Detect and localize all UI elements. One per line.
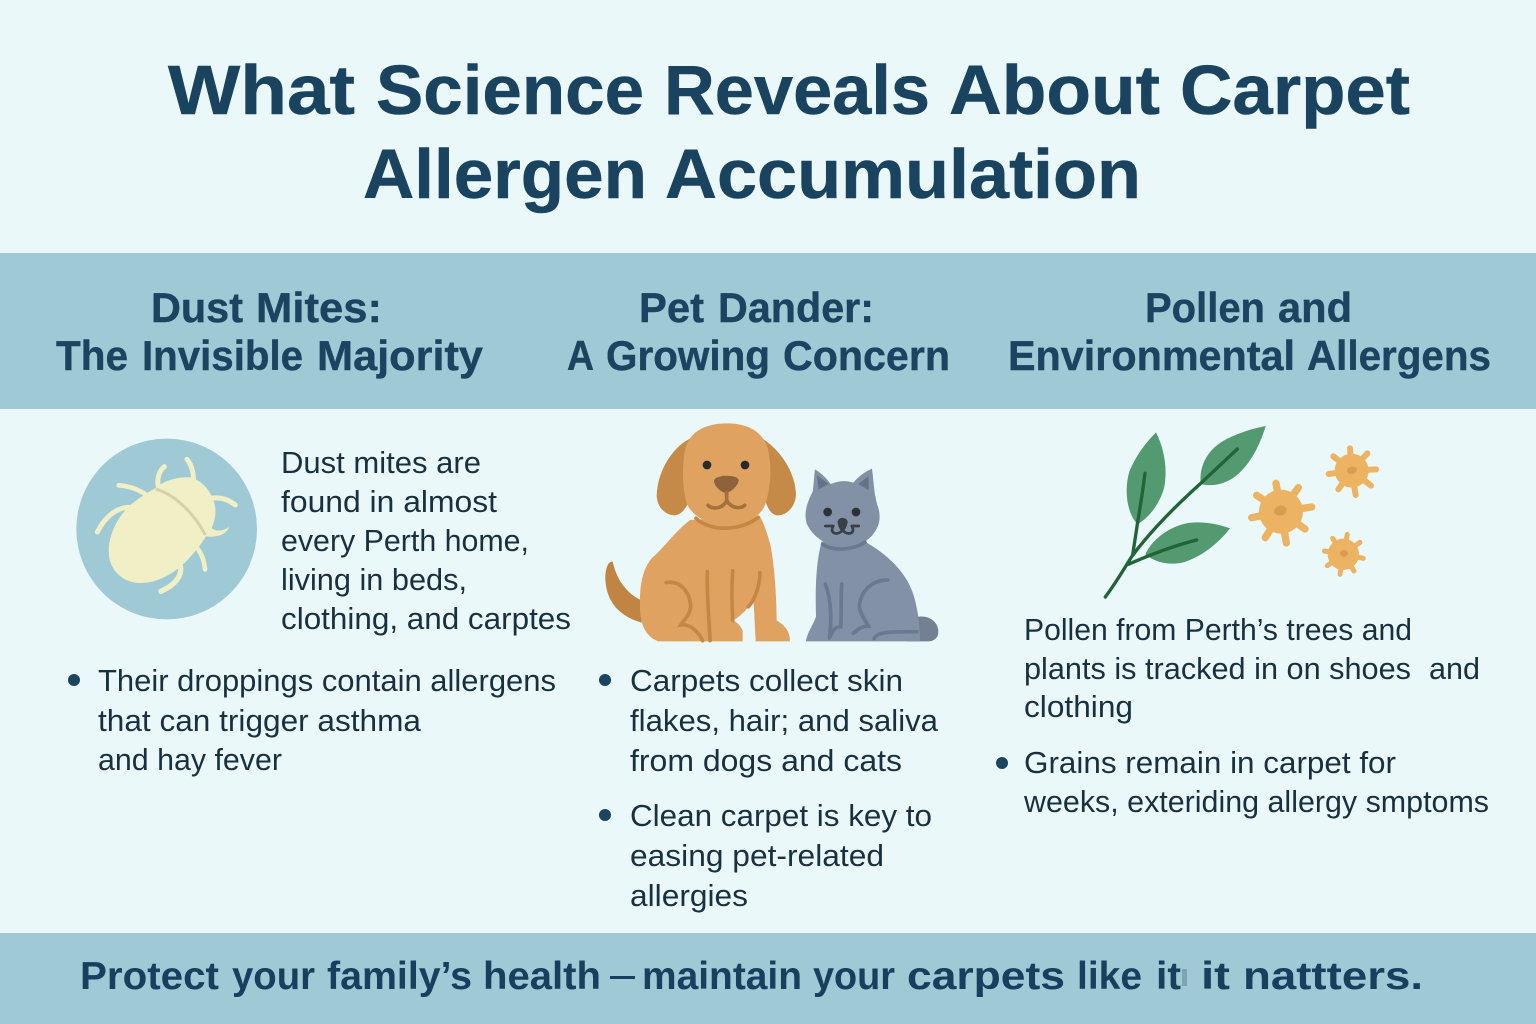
footer call to action: nattters. <box>1243 955 1423 998</box>
heading: dust mites: Dust <box>151 284 243 331</box>
footer call to action: your <box>813 955 895 998</box>
bullet: grains remain: Grains remain in carpet for <box>1024 746 1396 780</box>
heading: dust mites: Invisible <box>142 332 303 379</box>
heading: pollen: and <box>1278 284 1352 331</box>
title: Accumulation <box>665 135 1141 213</box>
heading: pollen: Pollen <box>1145 284 1265 331</box>
footer call to action: like <box>1077 955 1142 998</box>
text: pollen intro <box>1024 613 1480 724</box>
bullet: carpets collect <box>599 664 938 778</box>
text: pollen intro: Pollen from Perth’s trees and <box>1024 613 1412 647</box>
icon: leaves and pollen <box>1105 426 1376 597</box>
bullet: carpets collect: Carpets collect skin <box>630 664 903 698</box>
heading: pet dander <box>567 284 950 379</box>
header band <box>0 253 1536 409</box>
text: dust mites intro: living in beds, <box>281 563 467 597</box>
title: About <box>949 51 1160 129</box>
footer call to action: health <box>483 955 601 998</box>
bullet: clean carpet: easing pet-related <box>630 839 884 873</box>
bullet: clean carpet: Clean carpet is key to <box>630 799 932 833</box>
footer call to action: it <box>1201 955 1230 998</box>
heading: dust mites <box>56 284 484 379</box>
text: dust mites intro: found in almost <box>281 485 498 519</box>
icon: dust mite <box>76 439 257 619</box>
footer call to action: your <box>232 955 315 998</box>
heading: pet dander: A <box>567 332 594 379</box>
text: pollen intro: and <box>1429 652 1480 686</box>
bullet: clean carpet <box>599 799 932 913</box>
footer call to action <box>80 955 1423 998</box>
icon: dog <box>605 423 796 641</box>
heading: pet dander: Growing <box>606 332 770 379</box>
bullet: grains remain <box>996 746 1489 819</box>
bullet: carpets collect: from dogs and cats <box>630 744 902 778</box>
footer call to action: it <box>1156 955 1181 998</box>
heading: pollen: Allergens <box>1307 332 1491 379</box>
heading: dust mites: The <box>56 332 128 379</box>
title: What <box>168 51 355 129</box>
footer call to action: Protect <box>80 955 219 998</box>
heading: dust mites: Majority <box>317 332 484 379</box>
heading: pet dander: Concern <box>783 332 950 379</box>
title <box>168 51 1410 213</box>
heading: pollen <box>1008 284 1491 379</box>
heading: dust mites: Mites: <box>256 284 382 331</box>
icon: leaf branch <box>1105 426 1266 597</box>
icon: dog and cat <box>605 423 938 641</box>
title: Carpet <box>1180 51 1410 129</box>
footer call to action: maintain <box>642 955 802 998</box>
bullet: grains remain: weeks, exteriding allergy smptoms <box>1023 785 1489 819</box>
footer call to action: family’s <box>327 955 472 998</box>
heading: pet dander: Dander: <box>718 284 874 331</box>
heading: pollen: Environmental <box>1008 332 1295 379</box>
bullet: dust mite droppings: Their droppings contain allergens <box>98 664 556 698</box>
bullet: dust mite droppings <box>68 664 556 777</box>
title: Reveals <box>664 51 930 129</box>
text: pollen intro: plants is tracked in on shoes <box>1024 652 1411 686</box>
bullet: dust mite droppings: and hay fever <box>98 743 282 777</box>
footer band <box>0 933 1536 1024</box>
text: dust mites intro: clothing, and carptes <box>281 602 571 636</box>
footer call to action: carpets <box>907 955 1065 998</box>
heading: pet dander: Pet <box>639 284 704 331</box>
bullet: carpets collect: flakes, hair; and saliva <box>630 704 938 738</box>
icon: pollen grains <box>1252 448 1376 574</box>
title: Science <box>376 51 644 129</box>
text: dust mites intro: Dust mites are <box>281 446 481 480</box>
text: pollen intro: clothing <box>1024 690 1133 724</box>
text: dust mites intro: every Perth home, <box>281 524 529 558</box>
bullet: dust mite droppings: that can trigger asthma <box>98 704 421 738</box>
icon: cat <box>806 469 938 641</box>
bullet: clean carpet: allergies <box>630 879 748 913</box>
text: dust mites intro <box>281 446 571 636</box>
title: Allergen <box>363 135 647 213</box>
